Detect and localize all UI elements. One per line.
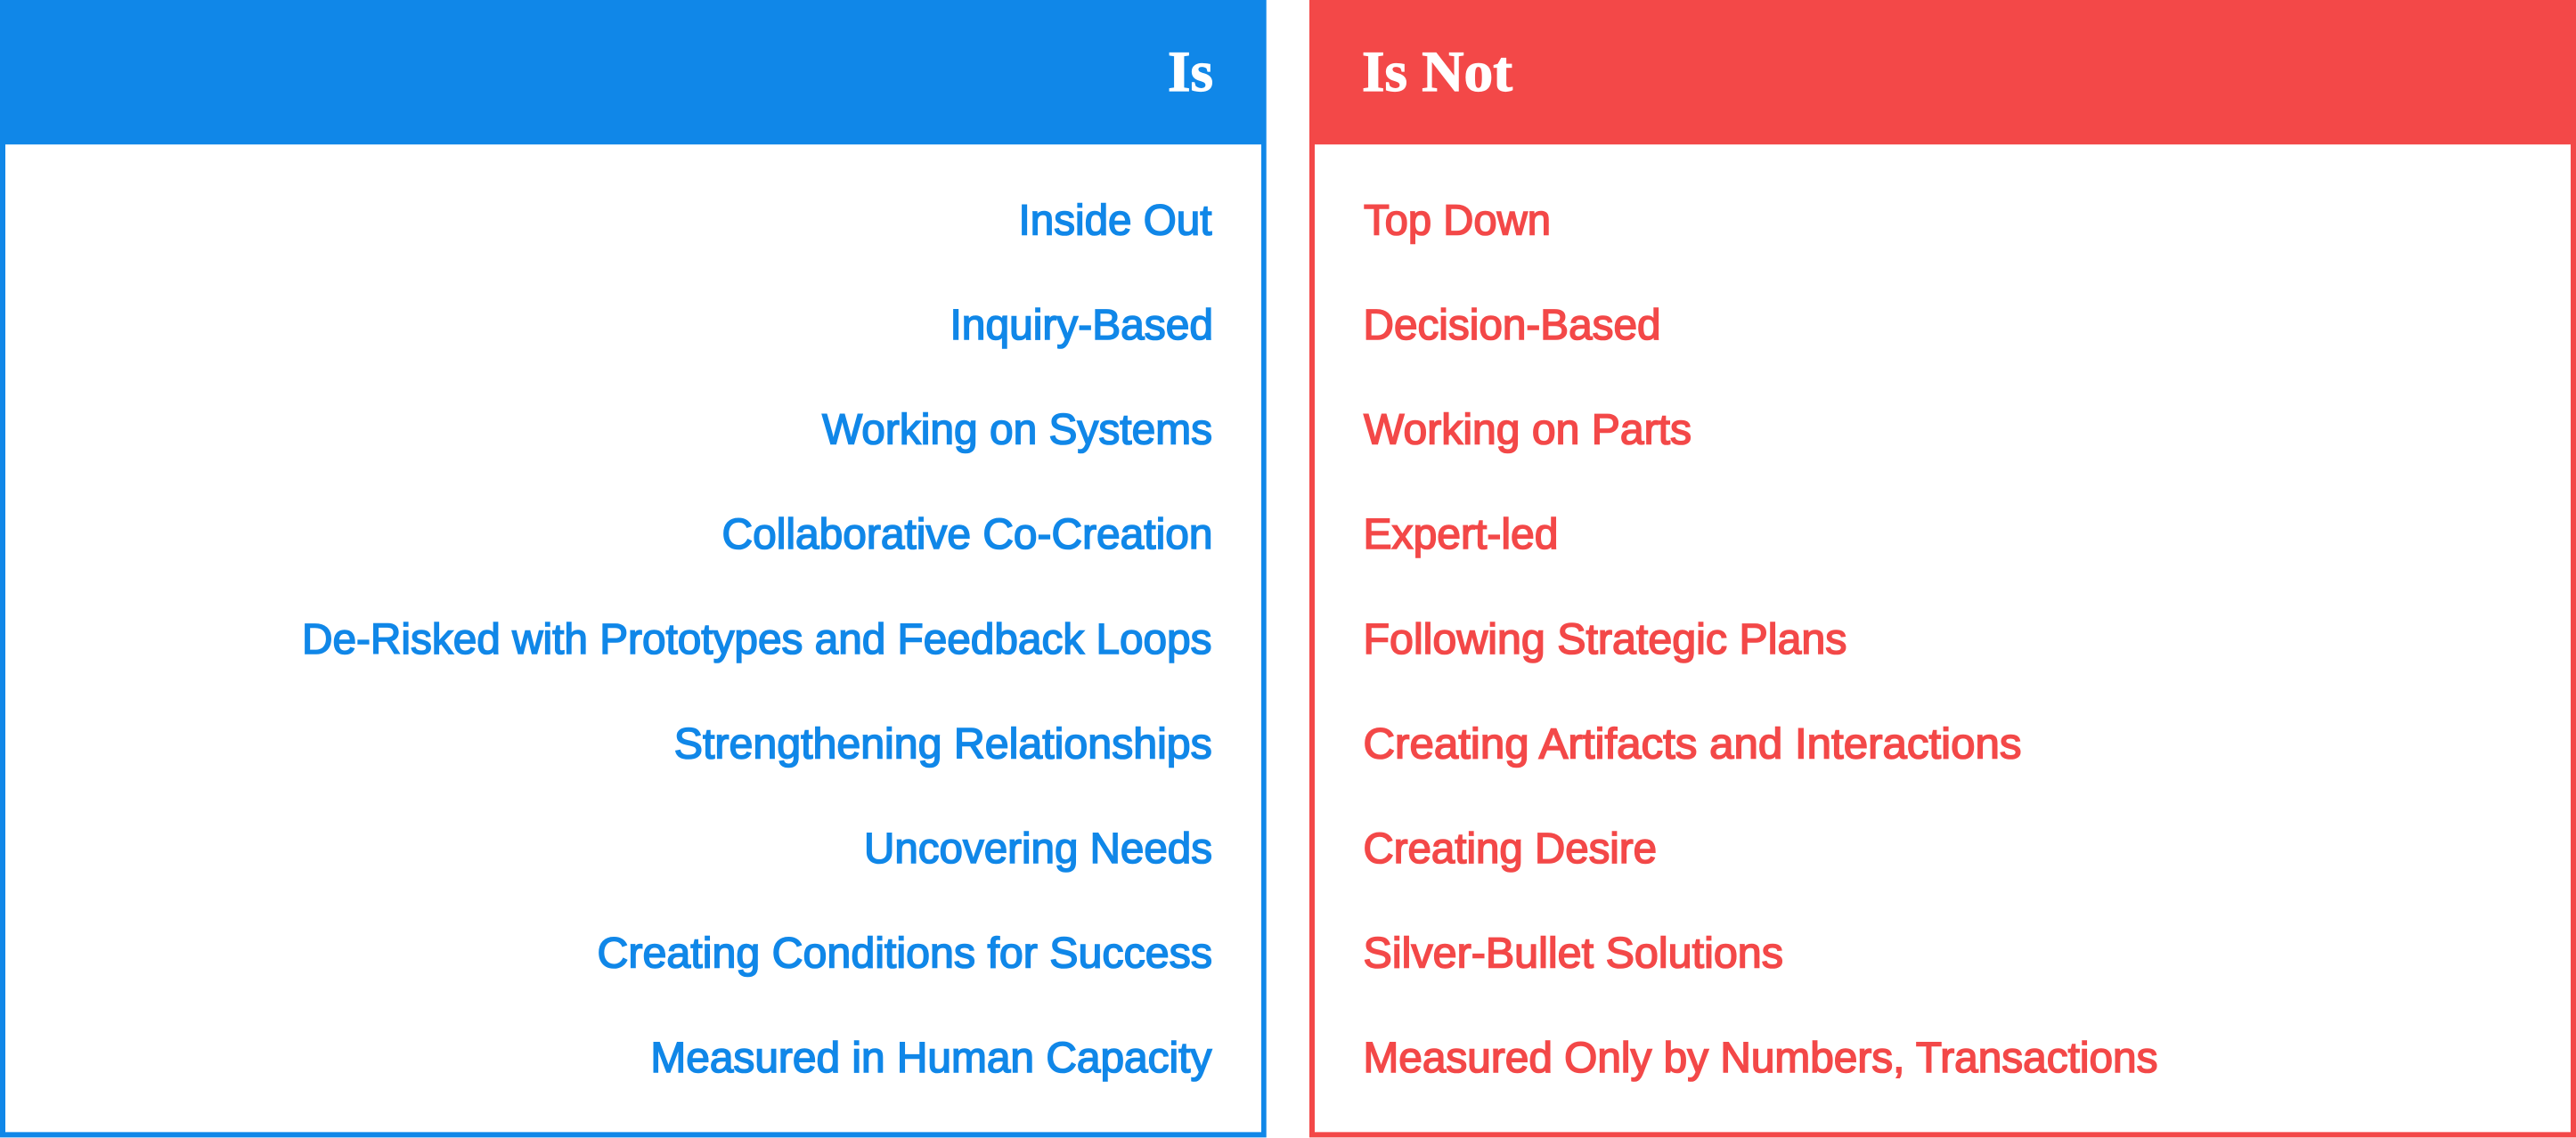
item: Measured Only by Numbers, Transactions	[1363, 1034, 2157, 1082]
panel: Is Not	[1309, 0, 2576, 1137]
item: Expert-led	[1363, 510, 1559, 558]
item: Silver-Bullet Solutions	[1363, 930, 1783, 978]
item: Top Down	[1364, 196, 1551, 244]
item: Creating Artifacts and Interactions	[1363, 719, 2022, 768]
item: Creating Desire	[1363, 825, 1657, 873]
item: Measured in Human Capacity	[650, 1034, 1212, 1082]
item: Inquiry-Based	[950, 301, 1213, 349]
item: Working on Parts	[1364, 406, 1692, 454]
item: Strengthening Relationships	[674, 719, 1212, 768]
item: Following Strategic Plans	[1363, 615, 1847, 663]
panel frame: Is	[0, 0, 1267, 1137]
list: Is Not items	[1363, 196, 2157, 1082]
item: Decision-Based	[1363, 301, 1660, 349]
list: Is items	[302, 196, 1213, 1082]
item: Creating Conditions for Success	[597, 930, 1212, 978]
item: De-Risked with Prototypes and Feedback Loops	[302, 615, 1211, 663]
item: Uncovering Needs	[864, 825, 1212, 873]
item: Working on Systems	[822, 406, 1212, 454]
panel frame: Is Not	[1309, 0, 2576, 1137]
item: Collaborative Co-Creation	[721, 510, 1213, 558]
panel: Is	[0, 0, 1267, 1137]
heading: Is: Is	[1168, 40, 1213, 104]
item: Inside Out	[1019, 196, 1212, 244]
heading: Is Not: Is Not	[1362, 40, 1512, 104]
